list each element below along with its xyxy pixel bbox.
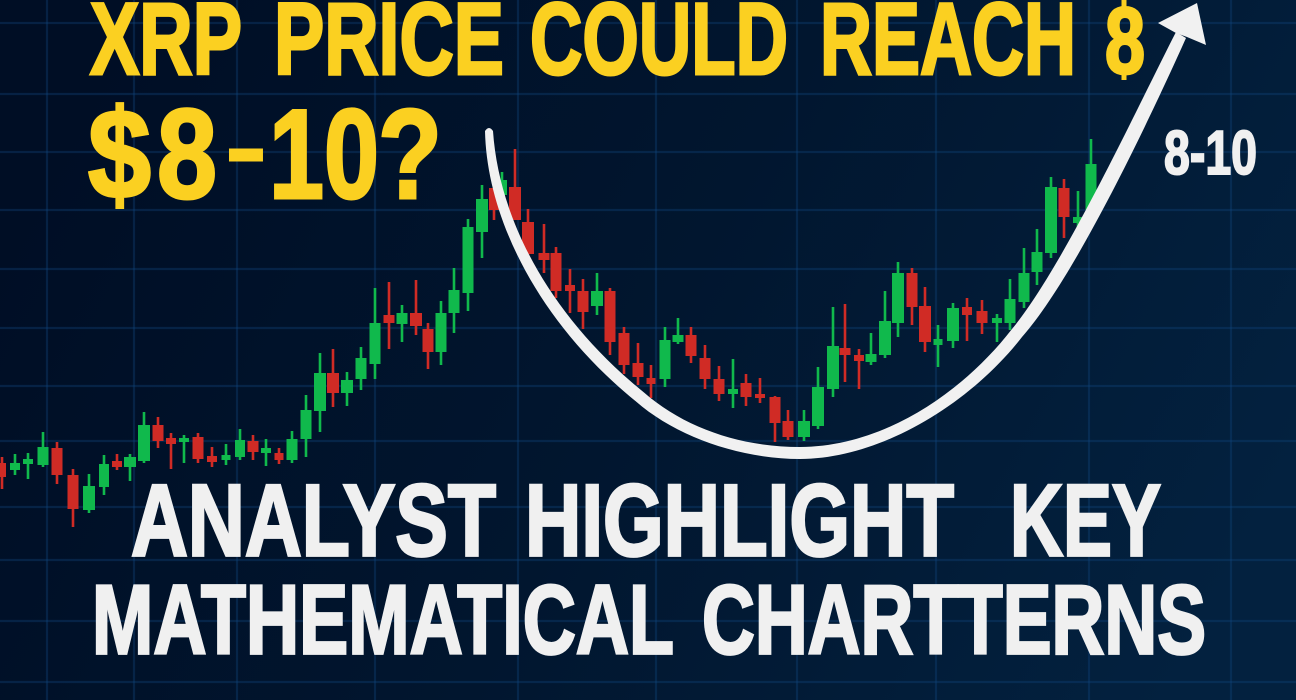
arrow: rounded-bottom curve rising to the top right bbox=[485, 3, 1206, 459]
headline line 2: 8 bbox=[157, 83, 217, 225]
headline line 2: – bbox=[228, 92, 264, 204]
subtitle line 1 bbox=[131, 464, 1161, 578]
subtitle line 2 bbox=[92, 564, 1206, 674]
subtitle line 1: HIGHLIGHT bbox=[525, 464, 954, 578]
subtitle line 2: MATHEMATICAL bbox=[92, 564, 674, 674]
title: yellow headline bbox=[88, 0, 1145, 225]
headline line 2: ? bbox=[378, 83, 442, 225]
headline line 2: $ bbox=[88, 83, 151, 225]
headline line 2 bbox=[88, 83, 442, 225]
green candles bbox=[10, 139, 1096, 513]
red candles bbox=[0, 149, 1070, 527]
subtitle line 1: ANALYST bbox=[131, 464, 496, 578]
subtitle: white headline bbox=[92, 464, 1206, 674]
price target label: 8-10 bbox=[1164, 119, 1257, 188]
subtitle line 1: KEY bbox=[1010, 464, 1161, 578]
headline line 2: 10 bbox=[269, 83, 379, 225]
headline line 1 bbox=[90, 0, 1145, 96]
candlestick chart bbox=[0, 139, 1096, 527]
